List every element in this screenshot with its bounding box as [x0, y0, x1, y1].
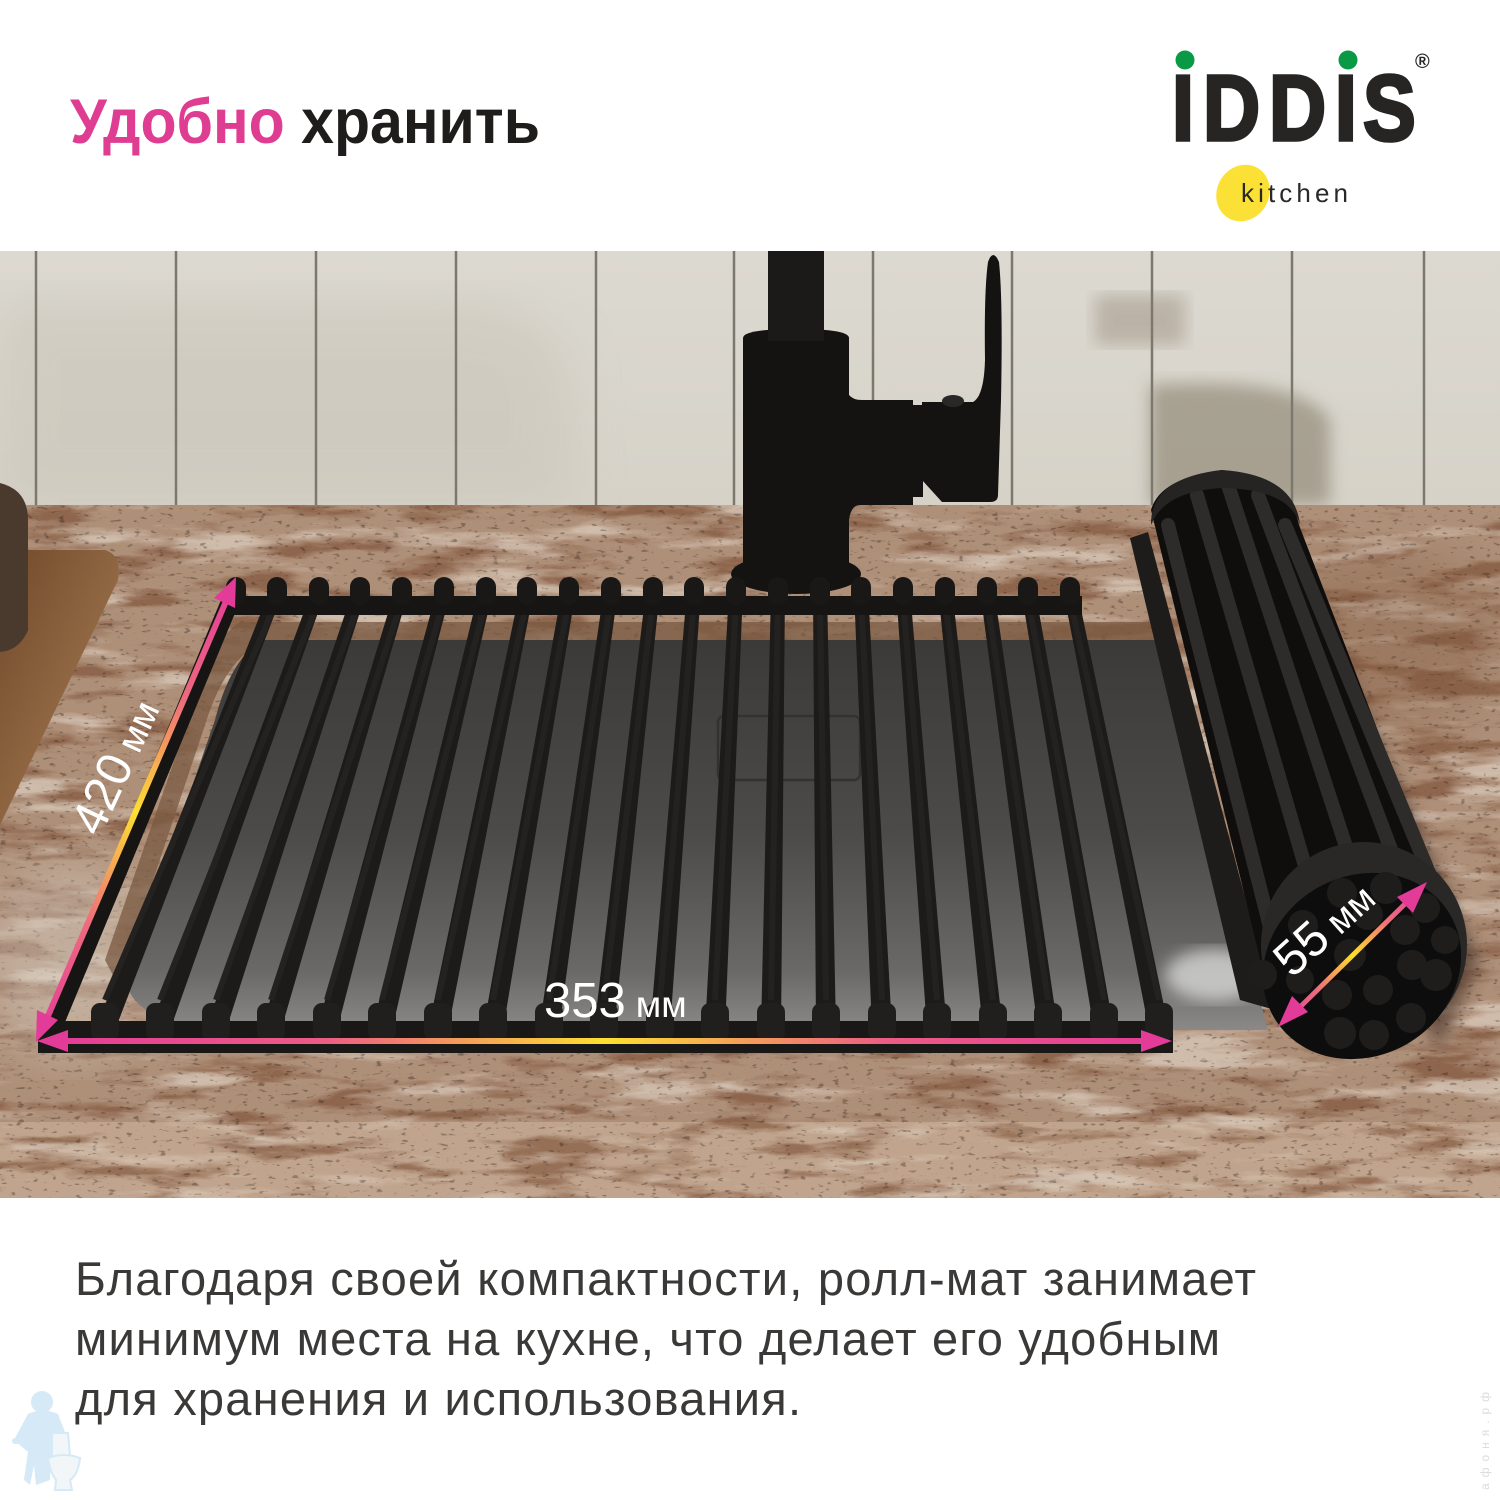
roll mat flat: [38, 577, 1173, 1053]
arrow: 353 mm: [37, 1030, 1172, 1052]
body text: [75, 1252, 1256, 1425]
rod highlights: [102, 832, 387, 1001]
roll shadow: [1345, 644, 1487, 1051]
registered mark: ®: [1415, 51, 1430, 73]
tiled wall: [0, 251, 1500, 507]
label: 55 mm: 55мм: [1263, 870, 1385, 987]
watermark: plumber with toilet: [12, 1391, 80, 1490]
body line 2: минимум места на кухне, что делает его удобным: [75, 1312, 1220, 1365]
logo: IDDIS kitchen: [1172, 50, 1430, 231]
label: 353 mm: 353 мм: [544, 974, 687, 1028]
watermark: site name: афоня.рф: [1478, 1392, 1492, 1490]
marble countertop: [0, 505, 1500, 1198]
roll end face: [1264, 873, 1461, 1060]
roll end rim: [1261, 842, 1467, 1012]
bottom bar: [38, 1021, 1173, 1053]
label: 420 mm: 420мм: [61, 691, 170, 843]
rods: [95, 590, 1169, 1030]
rolled mat: [1130, 470, 1495, 1095]
title: Удобно хранить: [70, 87, 540, 157]
arrow: 55 mm: [1278, 882, 1427, 1027]
body line 3: для хранения и использования.: [75, 1372, 801, 1425]
cutting board: [0, 550, 119, 825]
top bar: [232, 596, 1082, 615]
kitchen label: kitchen: [1241, 178, 1348, 208]
roll top ring: [1151, 470, 1300, 525]
logo wordmark: IDDIS: [1172, 57, 1416, 160]
photo: kitchen sink scene: [0, 251, 1500, 1198]
left rail: [52, 597, 232, 1030]
roll end bar spirals: [1247, 872, 1459, 1050]
yellow blob: [1206, 155, 1280, 231]
faucet: [731, 251, 1002, 594]
roll body: [1151, 470, 1414, 960]
sink rim: [105, 622, 1160, 985]
glass: [0, 483, 28, 652]
folded end: [1130, 532, 1275, 1010]
roll bars: [1168, 485, 1432, 935]
sink basin: [128, 640, 1268, 1030]
rod top caps: [226, 577, 1080, 596]
logo green dots: [1176, 50, 1358, 70]
arrow: 420 mm: [36, 577, 236, 1042]
rod bottom caps: [91, 1003, 1173, 1021]
body line 1: Благодаря своей компактности, ролл-мат занимает: [75, 1252, 1256, 1305]
